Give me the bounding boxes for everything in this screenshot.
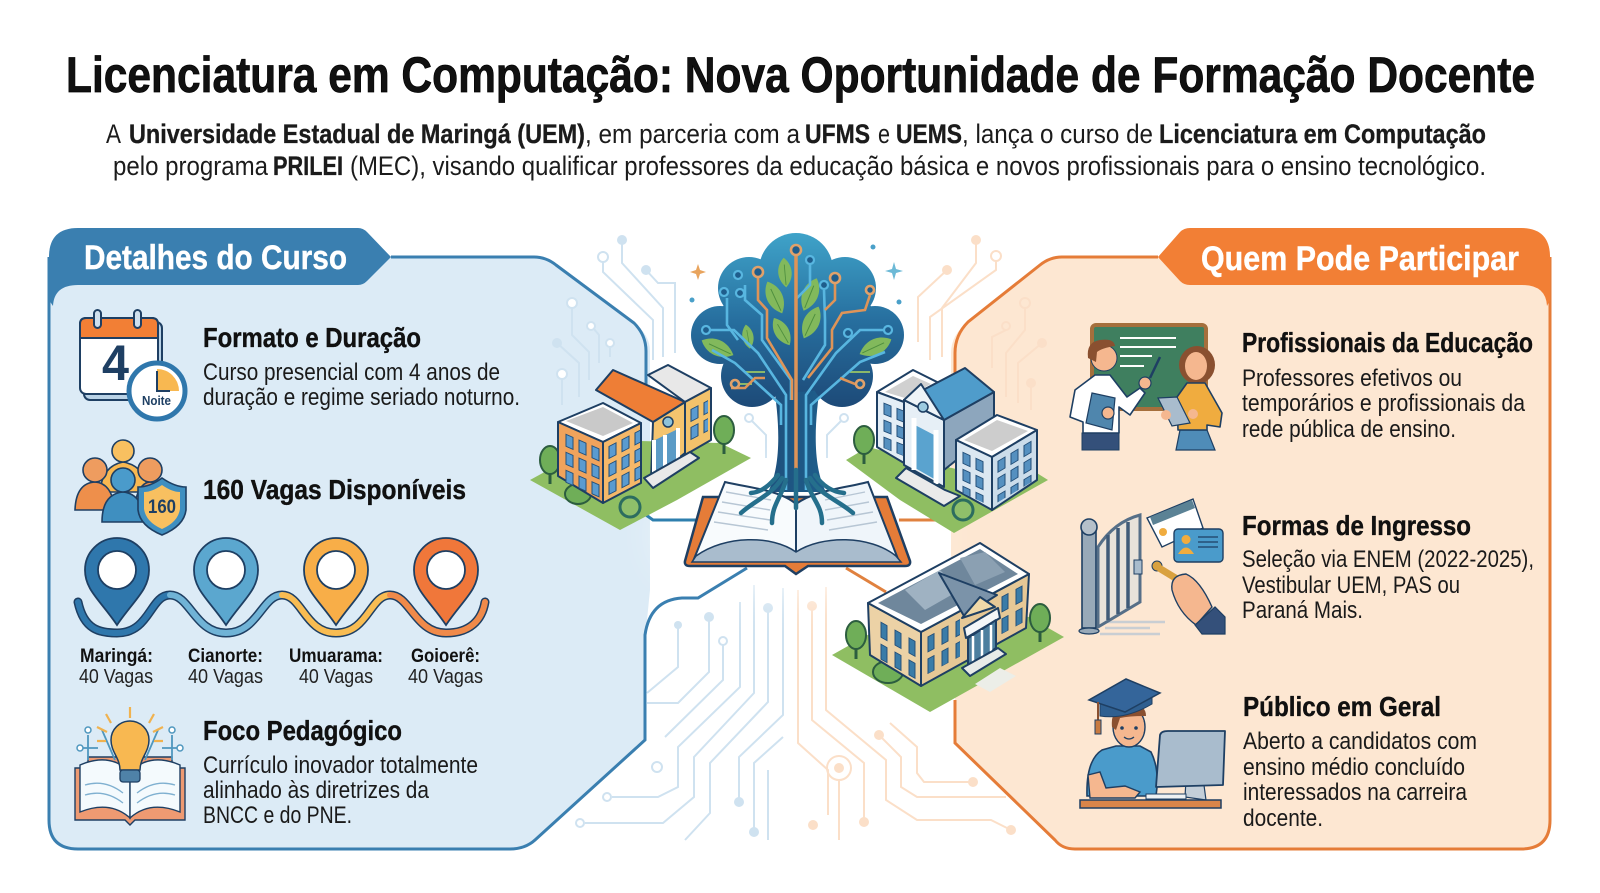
leaves (698, 257, 895, 384)
page edge (692, 540, 901, 562)
text: profissionais da educação (1242, 327, 1533, 443)
text: foco pedagógico: Foco Pedagógico (203, 715, 402, 746)
building: third campus (832, 543, 1064, 712)
item: formato e duração (80, 310, 520, 419)
icon: people and shield (75, 440, 186, 535)
text: profissionais da educação: rede pública de ensino. (1242, 416, 1456, 443)
icon: student at computer (1080, 679, 1225, 808)
book cover (685, 497, 910, 574)
text: público em geral (1243, 691, 1477, 832)
text lines (714, 492, 877, 530)
trunk (768, 375, 826, 492)
pin: Umuarama (304, 538, 368, 625)
intro text: UEMS (896, 119, 962, 149)
canopy (691, 233, 904, 407)
item: foco pedagógico (75, 707, 478, 829)
city labels: 40 Vagas (79, 666, 153, 688)
panel borders left (49, 257, 747, 849)
city labels: Umuarama: (289, 646, 383, 667)
text: profissionais da educação: temporários e profissionais da (1242, 390, 1526, 417)
pin: Goioerê (414, 538, 478, 625)
text: foco pedagógico: Currículo inovador totalmente (203, 752, 478, 779)
icon: teachers at blackboard (1070, 325, 1222, 450)
icon: calendar and clock (80, 310, 185, 419)
icon: calendar and clock: Noite (142, 393, 171, 408)
illustration: open book (685, 470, 910, 574)
text: formas de ingresso: Seleção via ENEM (2022-2025), (1242, 546, 1534, 573)
city labels: 40 Vagas (299, 666, 373, 688)
item: profissionais da educação (1070, 325, 1533, 450)
text: formas de ingresso: Vestibular UEM, PAS ou (1242, 572, 1460, 599)
text: público em geral: docente. (1243, 805, 1323, 832)
roots (741, 470, 853, 523)
text: formas de ingresso: Formas de Ingresso (1242, 510, 1471, 541)
route line (78, 595, 485, 633)
right page (796, 482, 898, 559)
intro text: e (878, 119, 890, 149)
icon: gate, cards and key (1079, 499, 1225, 634)
item: formas de ingresso (1079, 499, 1534, 634)
text: foco pedagógico: BNCC e do PNE. (203, 802, 352, 829)
text: foco pedagógico (203, 715, 478, 829)
header: quem pode participar: Quem Pode Participar (1201, 240, 1519, 278)
chart: route of four cities (78, 538, 485, 688)
building: blue campus (846, 368, 1048, 533)
text: público em geral: ensino médio concluído (1243, 754, 1465, 781)
icon: book with lightbulb (75, 707, 185, 825)
item: 160 vagas (75, 440, 466, 535)
intro text: UFMS (805, 119, 870, 149)
header: detalhes do curso (49, 228, 391, 306)
circuit branches (706, 256, 888, 490)
city labels: Cianorte: (188, 646, 263, 667)
text: 160 vagas: 160 Vagas Disponíveis (203, 474, 466, 505)
panel: quem pode participar background (951, 228, 1550, 849)
intro text: Licenciatura em Computação (1159, 119, 1486, 149)
header: detalhes do curso: Detalhes do Curso (84, 239, 347, 277)
illustration: circuit tree (690, 233, 904, 492)
intro text: , lança o curso de (962, 119, 1153, 149)
pin: Maringá (85, 538, 149, 625)
text: público em geral: Aberto a candidatos com (1243, 728, 1477, 755)
intro text: pelo programa (113, 151, 269, 181)
background circuits blue (552, 235, 783, 840)
text: profissionais da educação: Profissionais da Educação (1242, 327, 1533, 358)
header: quem pode participar (1158, 228, 1550, 306)
city labels: 40 Vagas (408, 666, 483, 688)
item: público em geral (1080, 679, 1477, 832)
pin: Cianorte (194, 538, 258, 625)
text: formato e duração: duração e regime seriado noturno. (203, 384, 520, 411)
panel borders right (955, 257, 1550, 849)
text: formato e duração (203, 322, 520, 411)
connector lines (639, 510, 954, 592)
circuit nodes (702, 256, 892, 337)
icon: calendar and clock: 4 (102, 335, 129, 391)
sparkles (690, 244, 903, 304)
text: público em geral: Público em Geral (1243, 691, 1441, 722)
text: foco pedagógico: alinhado às diretrizes da (203, 777, 430, 804)
intro text (106, 119, 1486, 181)
intro text: Universidade Estadual de Maringá (UEM) (129, 119, 585, 149)
city labels: Maringá: (80, 646, 153, 667)
city labels: 40 Vagas (188, 666, 263, 688)
icon: people and shield: 160 (148, 497, 176, 518)
building: orange campus (530, 365, 751, 530)
intro text: A (106, 119, 121, 149)
city labels: Goioerê: (411, 646, 480, 667)
text: formato e duração: Curso presencial com 4 anos de (203, 359, 500, 386)
text: formato e duração: Formato e Duração (203, 322, 421, 353)
panel: detalhes do curso background (49, 228, 650, 849)
city labels (79, 646, 483, 688)
text: público em geral: interessados na carreira (1243, 779, 1468, 806)
text: profissionais da educação: Professores efetivos ou (1242, 365, 1462, 392)
intro text: (MEC), visando qualificar professores da educação básica e novos profissionais para o ensino tecnológico. (350, 151, 1486, 181)
text: formas de ingresso (1242, 510, 1534, 624)
text: formas de ingresso: Paraná Mais. (1242, 597, 1363, 624)
book glow (666, 480, 926, 590)
left page (694, 482, 796, 559)
background circuits orange (798, 235, 1047, 840)
intro text: , em parceria com a (585, 119, 801, 149)
intro text: PRILEI (273, 151, 343, 181)
